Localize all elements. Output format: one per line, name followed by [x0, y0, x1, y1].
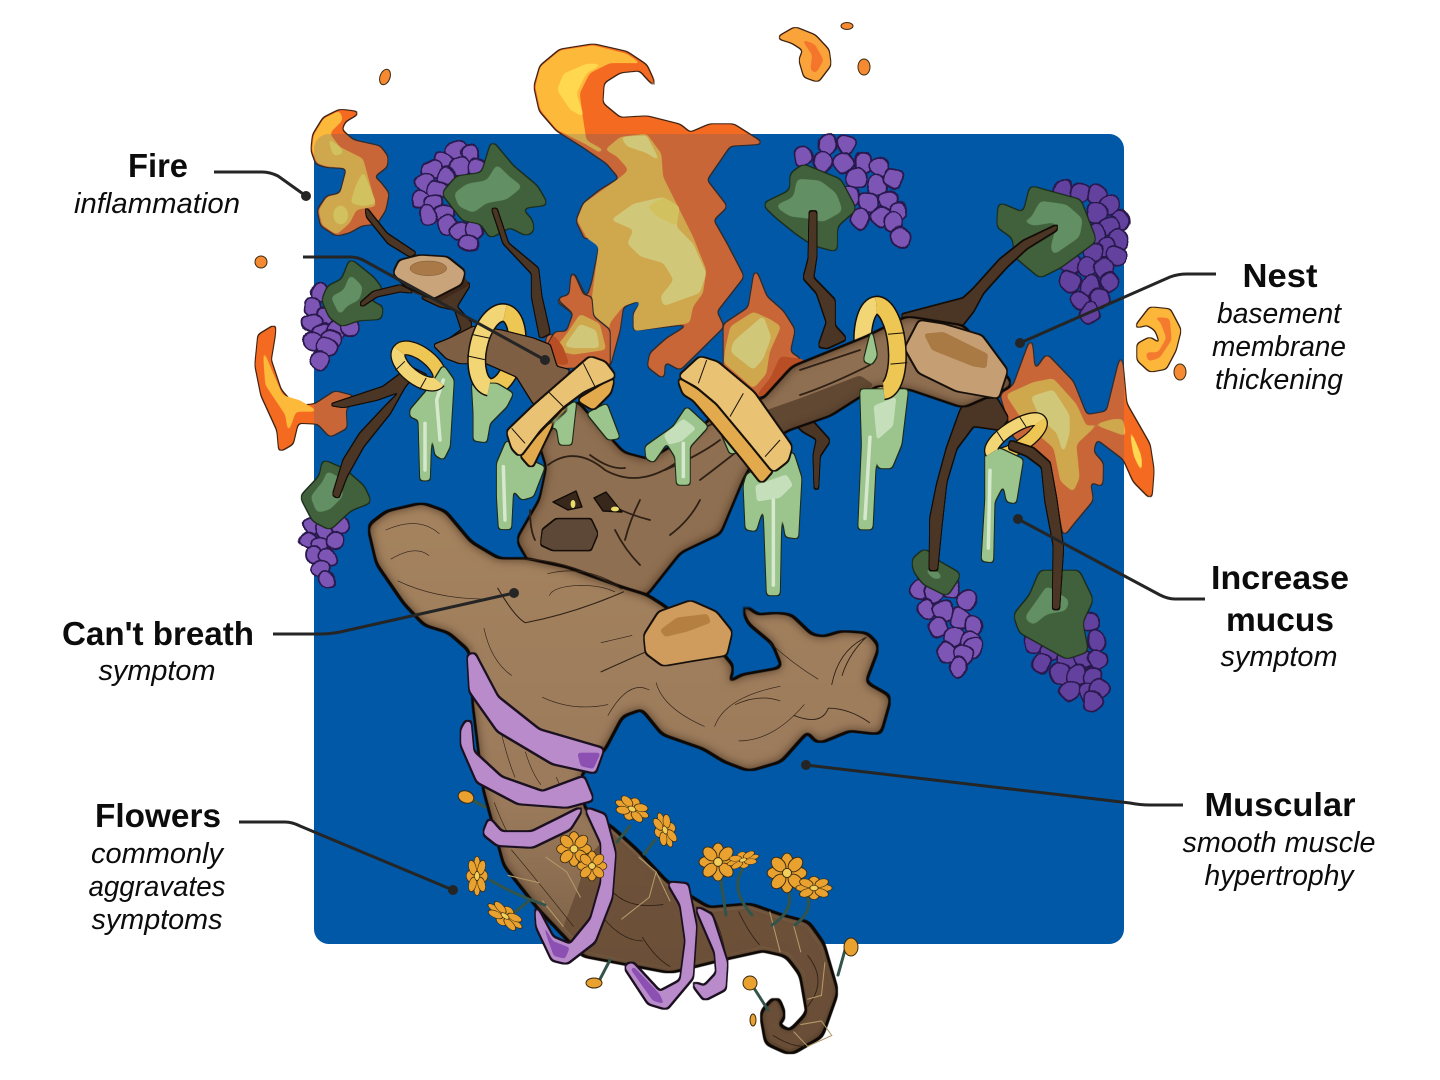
callout: Nest: thickening: [1215, 364, 1343, 396]
trunk: lower dark tail: [563, 832, 833, 1050]
ring backs: rear halves of yellow rings: [392, 304, 1046, 461]
ring: big left: [507, 357, 616, 468]
flower: tail centre: [767, 853, 807, 893]
illustration: yellow rings front: [388, 303, 1040, 483]
leaf: top centre: [762, 164, 857, 252]
callout: Nest: [1015, 257, 1346, 396]
trunk: upper head and main right branch: [517, 317, 1013, 600]
ring: small upper left front: [388, 351, 439, 396]
illustration: purple ribbons: [461, 653, 727, 1009]
ribbon 6: [690, 906, 727, 1000]
bud: tail tip: [750, 1014, 756, 1026]
grapes: lower left cluster: [299, 516, 349, 588]
blue background panel: [314, 134, 1124, 944]
leader: unlabeled line to branch: [303, 257, 550, 365]
leaf: lower right: [1013, 570, 1093, 659]
ring back: small upper left: [392, 341, 446, 391]
flame: top right curl: [776, 27, 831, 82]
bud: tail right: [844, 938, 858, 956]
flower: top centre side view: [611, 791, 653, 827]
head: right eye: [594, 492, 622, 512]
ribbon 1 shade: [577, 753, 601, 769]
grapes: top right cluster: [1054, 181, 1130, 323]
flowers: on trunk: [557, 832, 591, 866]
ribbon 5: [624, 882, 696, 1009]
flower: top right side view: [649, 809, 681, 851]
nest: right on branch: [905, 321, 1007, 398]
callout: Increase mucus: [1013, 514, 1349, 673]
callout: Fire: Fire: [128, 147, 188, 184]
grapes: lower centre cluster: [910, 579, 983, 676]
flower: left upper: [466, 856, 488, 896]
callout: Flowers: symptoms: [92, 904, 222, 936]
bud: top left: [456, 789, 476, 805]
flame: left middle: [255, 324, 354, 452]
flower: tail left: [699, 843, 737, 881]
callout: Nest: Nest: [1242, 257, 1318, 294]
flower: tail side: [725, 848, 761, 872]
slime: upper branch drips: [410, 365, 742, 529]
illustration: flowers and buds: [456, 789, 858, 1026]
callout: Muscular: hypertrophy: [1204, 860, 1355, 892]
ember drops: [255, 22, 1186, 380]
ring back: left vertical: [471, 309, 523, 391]
callout: Increase mucus: Increase: [1211, 559, 1349, 596]
flame: tongue and ember beside left ring: [545, 268, 610, 368]
head: creases: [530, 350, 870, 565]
flame: top left: [311, 109, 389, 236]
ring: left vertical front: [462, 307, 505, 387]
leaf: top left: [442, 140, 548, 238]
flame: left middle core: [262, 345, 320, 435]
grapes: top centre cluster: [794, 135, 910, 247]
ribbon 5 shade: [630, 966, 665, 1005]
callout: Flowers: Flowers: [95, 797, 221, 834]
flame: question curl core: [1145, 316, 1172, 362]
leaf: left: [322, 258, 383, 327]
ring back: small right: [986, 413, 1046, 461]
branches: left side: [328, 206, 570, 498]
callout: Muscular: Muscular: [1204, 786, 1356, 823]
callout: Flowers: [88, 797, 458, 936]
illustration: slime drips: [410, 328, 1023, 595]
trunk: pale roots: [508, 857, 832, 1046]
panel tint over flames: [314, 134, 1124, 944]
callout: Fire: [74, 147, 311, 220]
ribbon 1: [467, 653, 604, 773]
ring: small right front: [983, 408, 1040, 453]
branches: right side: [793, 211, 1063, 609]
callout: Flowers: aggravates: [88, 871, 226, 903]
nest: on shoulder: [644, 601, 732, 666]
leaf: top right: [997, 186, 1097, 278]
grapes: left cluster: [302, 284, 360, 369]
flame: middle right behind branch: [723, 267, 808, 398]
ring: big right: [677, 357, 792, 483]
callout: Fire: inflammation: [74, 188, 240, 220]
nest: top left: [393, 255, 470, 302]
leaf: lower centre: [912, 548, 962, 596]
flames: [255, 22, 1186, 537]
ring: right vertical front: [876, 303, 910, 391]
callout: Increase mucus: symptom: [1220, 641, 1338, 673]
flower: left lower: [482, 896, 528, 936]
head: frowning mouth: [541, 519, 598, 550]
ribbon 2: [461, 721, 593, 807]
ribbon 4: [535, 807, 616, 963]
flame: top right curl core: [800, 38, 824, 74]
slime: right branch drips: [743, 328, 1023, 595]
flower stems: [472, 800, 845, 1010]
trunk: wood creases: [386, 524, 870, 1046]
flower: tail right: [796, 876, 832, 900]
bud: tail left: [743, 976, 757, 990]
bud: bottom centre: [586, 978, 602, 988]
flame: right question curl: [1133, 307, 1181, 372]
ring back: right vertical: [859, 304, 901, 392]
callout: Can't breath: [62, 588, 519, 687]
flame: right side: [1000, 335, 1154, 537]
callout: Muscular: [801, 760, 1376, 892]
leaf: lower left: [300, 459, 372, 530]
head: left eye: [553, 491, 582, 510]
callout: Can't breath: Can't breath: [62, 615, 254, 652]
leaves: [300, 140, 1097, 659]
ribbon 3: [483, 806, 585, 847]
grapes: top left cluster: [412, 141, 486, 252]
trunk: branch shadow: [760, 375, 875, 448]
callout: Nest: basement: [1217, 298, 1343, 330]
callout: Can't breath: symptom: [98, 655, 216, 687]
grapes: [299, 135, 1130, 712]
illustration: branches: [328, 206, 1063, 609]
illustration: tree trunk and arms: [369, 317, 1013, 1054]
slime highlights: [425, 380, 990, 585]
callout: Flowers: commonly: [91, 838, 224, 870]
grapes: lower right cluster: [1024, 612, 1110, 712]
trunk: body with arms and tail: [369, 504, 890, 1054]
flower on trunk lower: [577, 851, 607, 881]
callout: Increase mucus: mucus: [1226, 601, 1334, 638]
flame: main central: [534, 44, 765, 379]
illustration: nests: [393, 255, 1007, 666]
ribbon 4 shade: [539, 915, 570, 959]
callout: Muscular: smooth muscle: [1182, 827, 1376, 859]
callout: Nest: membrane: [1212, 331, 1346, 363]
